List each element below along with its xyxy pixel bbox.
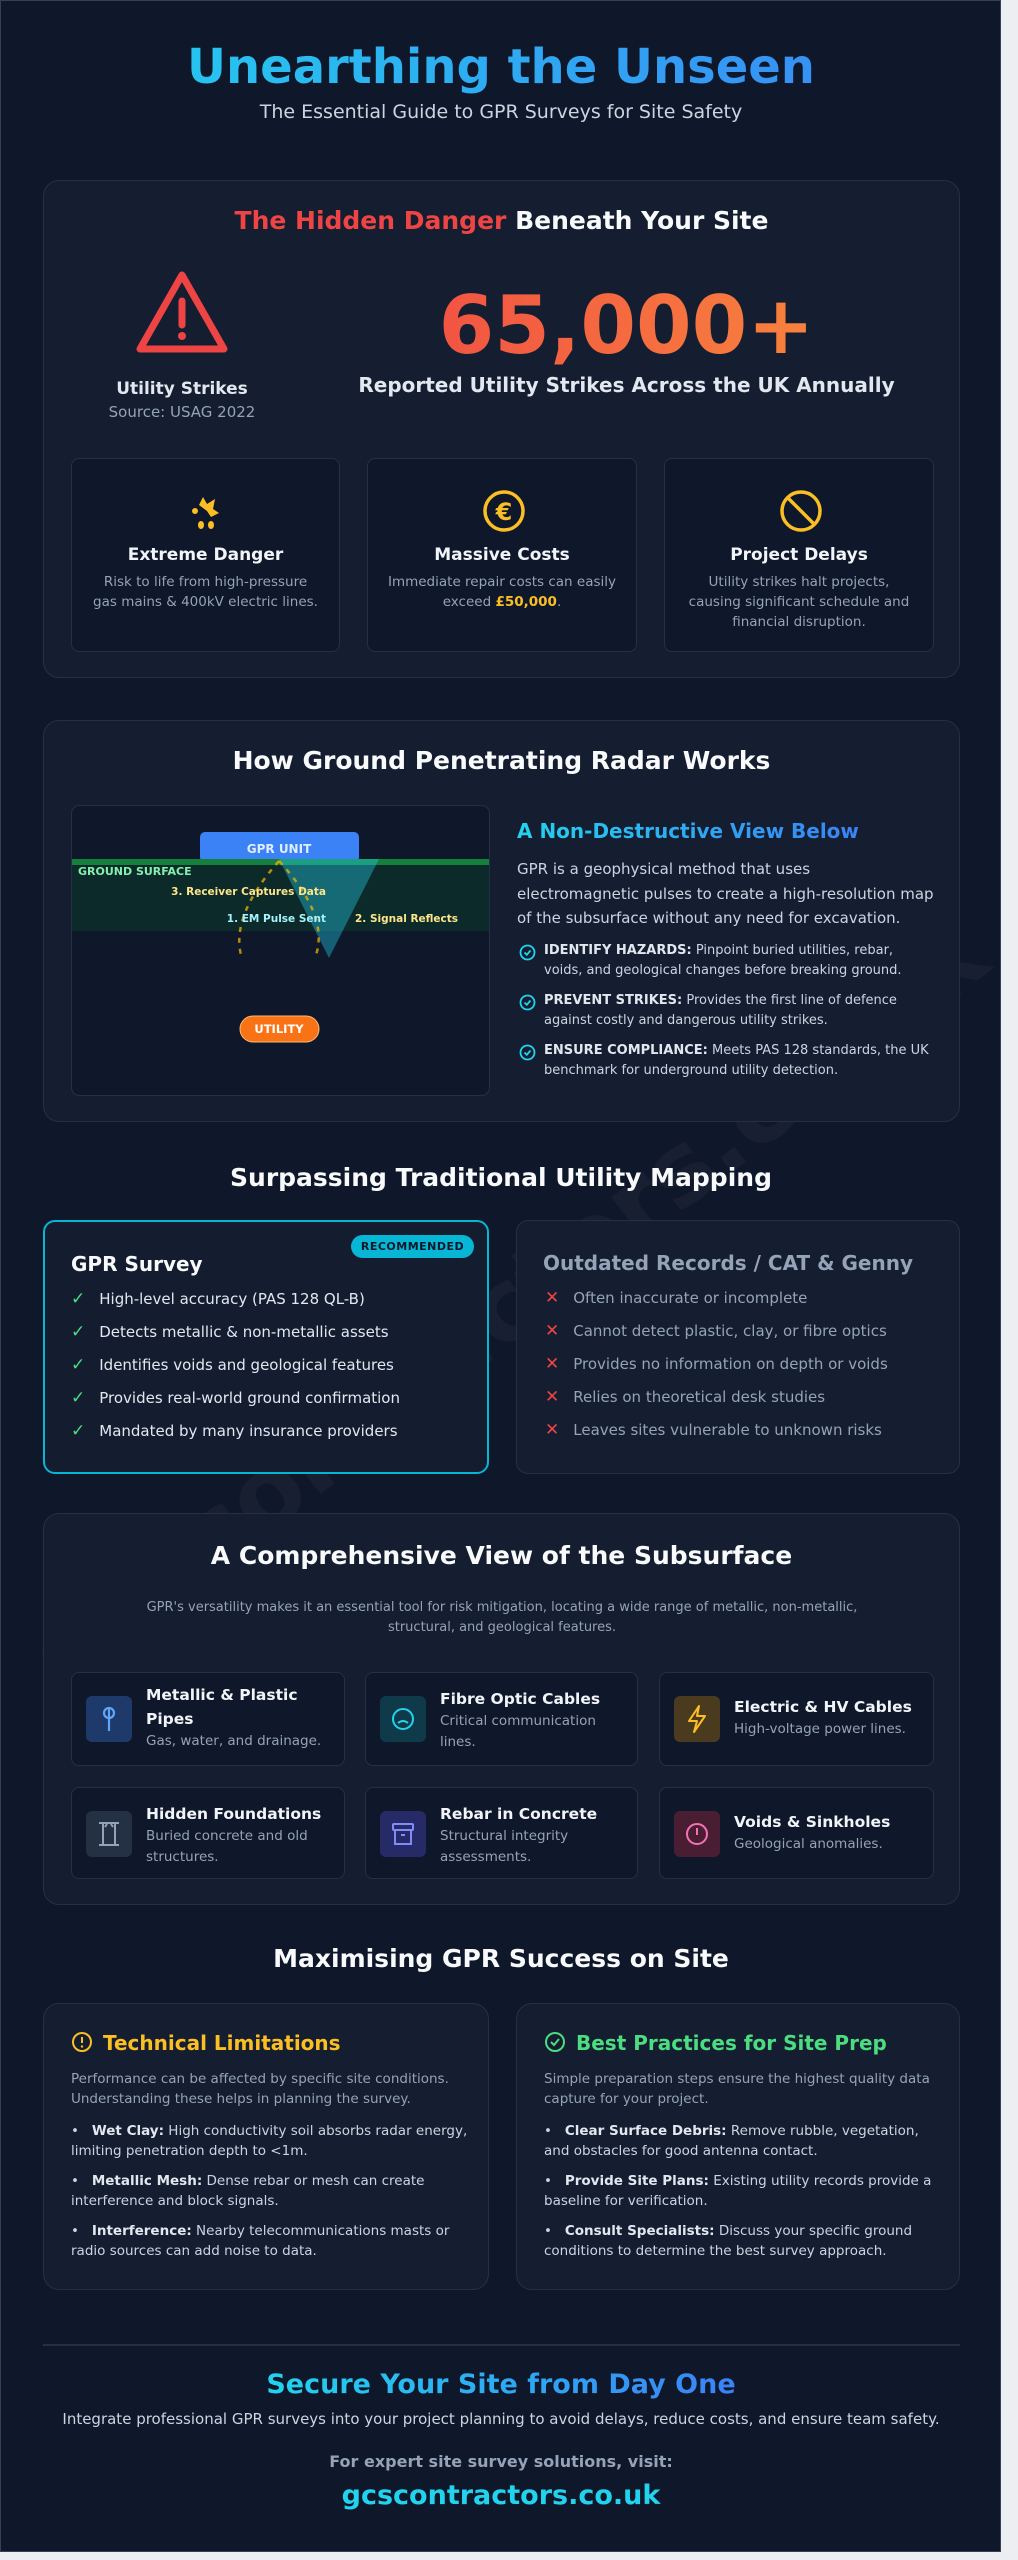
icon: lightning [674,1696,720,1742]
icon: void [674,1811,720,1857]
panel: technical limitations: • Interference: Nearby telecommunications masts or radio sources can add noise to data. [71,2223,449,2259]
heading: maximising success: Maximising GPR Success on Site [273,1944,729,1973]
bullet list [520,943,929,1078]
panel: outdated records: ✕ Relies on theoretical desk studies [545,1387,825,1407]
watermark: gcscontractors.co.uk [6,895,1001,1714]
icon: fibre [380,1696,426,1742]
subheading: non-destructive: A Non-Destructive View Below [517,819,859,843]
footer: gcscontractors.co.uk [342,2480,660,2511]
panel: best practices: Best Practices for Site Prep [576,2031,887,2055]
bullet list: IDENTIFY HAZARDS: Pinpoint buried utilities, rebar, voids, and geological changes before breaking ground. [544,943,902,978]
card: electric [659,1672,934,1766]
footer: Secure Your Site from Day One [266,2369,736,2400]
card: rebar: Structural integrity assessments. [440,1828,568,1865]
footer: For expert site survey solutions, visit: [329,2452,673,2471]
icon: explosion [192,497,219,529]
icon: foundation [86,1811,132,1857]
panel: best practices: • Consult Specialists: Discuss your specific ground conditions to determine the best survey approach. [544,2223,912,2259]
diagram: GPR: GROUND SURFACE [78,865,192,878]
card: fibre optic: Fibre Optic Cables [440,1690,600,1708]
card: pipes [71,1672,345,1766]
card: electric: High-voltage power lines. [734,1721,906,1737]
heading: surpassing traditional: Surpassing Traditional Utility Mapping [230,1163,772,1192]
panel: outdated records: ✕ Often inaccurate or incomplete [545,1288,807,1308]
icon: euro: € [495,498,512,526]
heading: hidden danger: The Hidden Danger Beneath Your Site [235,206,768,235]
panel: how GPR works [43,720,960,1122]
diagram: GPR: 3. Receiver Captures Data [171,886,326,898]
panel: GPR survey: ✓ Provides real-world ground confirmation [71,1388,400,1408]
subtitle: The Essential Guide to GPR Surveys for Site Safety [260,101,742,123]
utility: UTILITY [254,1022,304,1036]
panel: GPR survey [43,1220,489,1474]
card: voids: Geological anomalies. [734,1836,883,1852]
panel: GPR survey: ✓ Mandated by many insurance providers [71,1421,398,1441]
intro text: GPR's versatility makes it an essential tool for risk mitigation, locating a wide range of metallic, non-metallic, [147,1600,857,1615]
card: massive costs: Immediate repair costs can easily exceed £50,000. [388,574,616,610]
badge: recommended [351,1235,474,1258]
card: pipes: Gas, water, and drainage. [146,1733,321,1749]
icon: warning triangle [136,272,228,352]
bullet list: ENSURE COMPLIANCE: Meets PAS 128 standards, the UK benchmark for underground utility detection. [544,1043,929,1078]
diagram: GPR [71,805,490,1096]
card: electric: Electric & HV Cables [734,1698,912,1716]
GPR unit [200,832,359,862]
card: project delays: Project Delays [730,545,868,565]
icon: pipe [86,1696,132,1742]
badge: recommended: RECOMMENDED [361,1240,464,1253]
icon: rebar box [380,1811,426,1857]
card: fibre optic [365,1672,638,1766]
heading with icon: Technical Limitations [103,2031,341,2055]
panel: technical limitations [43,2003,489,2290]
card: pipes: Metallic & Plastic Pipes [146,1686,298,1728]
card: extreme danger [71,458,340,652]
footer: Integrate professional GPR surveys into your project planning to avoid delays, reduce costs, and ensure team safety. [62,2410,940,2428]
panel: best practices: • Clear Surface Debris: Remove rubble, vegetation, and obstacles for good antenna contact. [544,2123,919,2159]
card: extreme danger: Extreme Danger [128,545,283,565]
heading: A Comprehensive View of the Subsurface [211,1541,792,1570]
big stat: 65,000+ [439,279,814,372]
card: foundations: Buried concrete and old structures. [146,1828,308,1865]
panel: technical limitations: • Metallic Mesh: Dense rebar or mesh can create interference and block signals. [71,2173,424,2209]
intro text: structural, and geological features. [388,1620,616,1635]
footer [62,2369,940,2511]
card: fibre optic: Critical communication lines. [440,1713,596,1750]
panel: GPR survey: ✓ Identifies voids and geological features [71,1355,394,1375]
panel: best practices: • Provide Site Plans: Existing utility records provide a baseline for verification. [544,2173,931,2209]
paragraph: electromagnetic pulses to create a high-resolution map of the subsurface without any need for excavation. [517,884,934,927]
GPR unit: GPR UNIT [247,842,312,856]
card: rebar [365,1787,638,1879]
card: voids [659,1787,934,1879]
big stat: Reported Utility Strikes Across the UK Annually [358,373,895,397]
label: utility strikes: Source: USAG 2022 [109,403,255,421]
panel: comprehensive view [43,1513,960,1905]
panel: technical limitations: Performance can be affected by specific site conditions. Understanding these helps in planning the survey. [71,2071,449,2107]
card: extreme danger: Risk to life from high-pressure gas mains & 400kV electric lines. [93,574,318,610]
paragraph [517,860,934,927]
card: voids: Voids & Sinkholes [734,1813,890,1831]
panel: GPR survey: ✓ High-level accuracy (PAS 128 QL-B) [71,1289,365,1309]
panel: outdated records: Outdated Records / CAT & Genny [543,1251,913,1275]
title [1,35,1001,99]
panel: GPR survey: GPR Survey [71,1252,203,1276]
card: foundations [71,1787,345,1879]
card: rebar: Rebar in Concrete [440,1805,597,1823]
panel: outdated records: ✕ Leaves sites vulnerable to unknown risks [545,1420,882,1440]
label: utility strikes: Utility Strikes [116,379,248,399]
heading: how GPR works: How Ground Penetrating Radar Works [233,746,770,775]
panel: outdated records [516,1220,960,1474]
icon: prohibited [780,490,822,532]
paragraph: GPR is a geophysical method that uses [517,860,810,878]
utility [240,1016,319,1042]
panel: best practices [516,2003,960,2290]
panel: technical limitations: • Wet Clay: High conductivity soil absorbs radar energy, limiting penetration depth to <1m. [71,2123,467,2159]
bullet list: PREVENT STRIKES: Provides the first line of defence against costly and dangerous utility strikes. [544,993,897,1028]
card: project delays [664,458,934,652]
card: foundations: Hidden Foundations [146,1805,321,1823]
intro text [147,1600,857,1635]
panel: hidden danger [43,180,960,678]
diagram: GPR: 1. EM Pulse Sent [227,913,326,925]
panel: outdated records: ✕ Provides no information on depth or voids [545,1354,888,1374]
card: project delays: Utility strikes halt projects, causing significant schedule and financial disruption. [689,574,909,630]
panel: outdated records: ✕ Cannot detect plastic, clay, or fibre optics [545,1321,887,1341]
card: massive costs [367,458,637,652]
card: massive costs: Massive Costs [434,545,570,565]
big stat [358,279,895,397]
icon: euro [483,490,525,532]
diagram: GPR: 2. Signal Reflects [355,913,458,925]
panel: best practices: Simple preparation steps ensure the highest quality data capture for your project. [544,2071,930,2107]
panel: GPR survey: ✓ Detects metallic & non-metallic assets [71,1322,389,1342]
title: Unearthing the Unseen [187,39,815,95]
label: utility strikes [109,379,255,421]
